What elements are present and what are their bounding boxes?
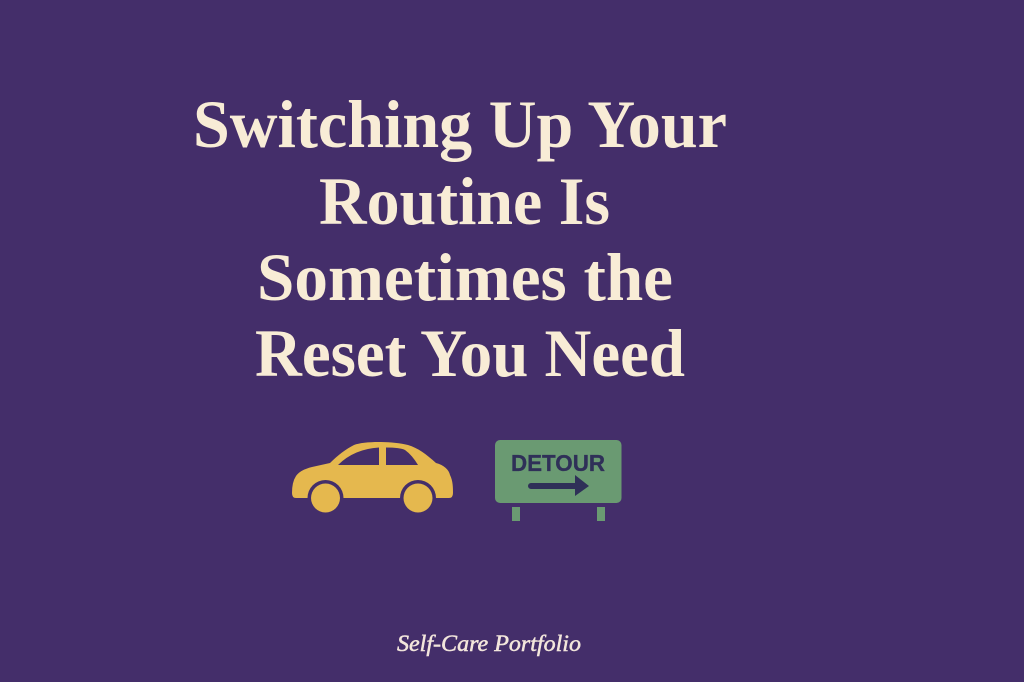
footer label: Self-Care Portfolio	[397, 631, 581, 656]
title: Sometimes the	[257, 239, 673, 315]
title: Routine Is	[319, 163, 610, 239]
icon: detour sign	[495, 440, 622, 521]
icon: car	[285, 442, 460, 518]
icon: detour sign: DETOUR	[511, 450, 605, 476]
title: Reset You Need	[255, 315, 685, 391]
title	[193, 86, 727, 391]
title: Switching Up Your	[193, 86, 727, 162]
